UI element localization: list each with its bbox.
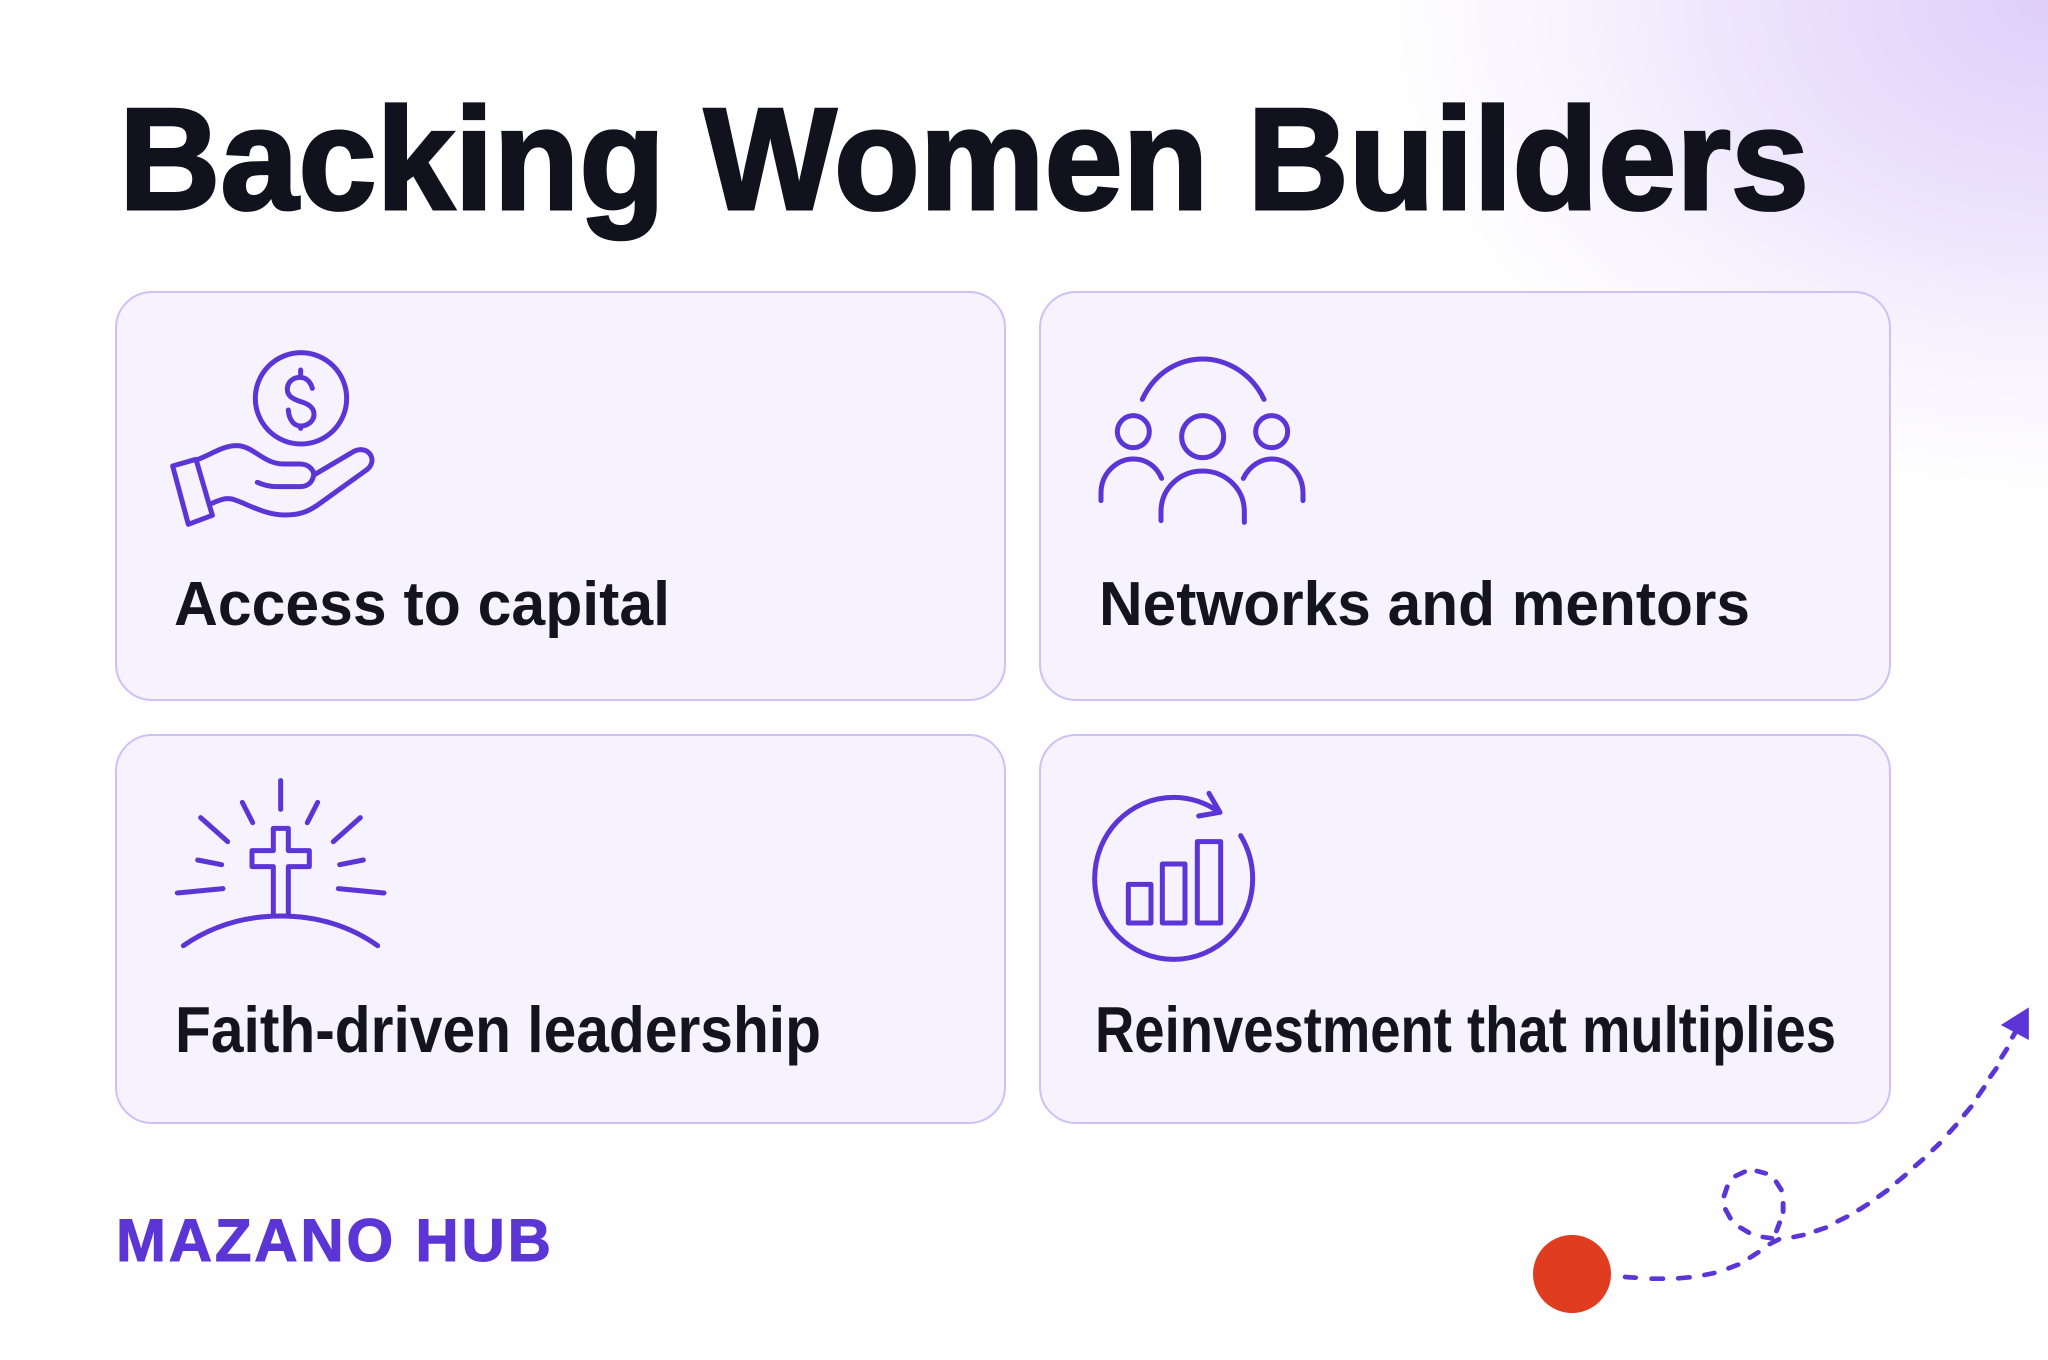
label: faith-driven leadership: Faith-driven leadership (175, 993, 821, 1066)
red start dot (1533, 1235, 1611, 1313)
icon: cross with rays (177, 781, 384, 946)
label: reinvestment that multiplies: Reinvestment that multiplies (1095, 993, 1836, 1066)
panel: access to capital (116, 292, 1005, 700)
icon: hand holding coin (173, 353, 372, 524)
icon: growth bars in circular arrow (1095, 793, 1253, 959)
brand name: MAZANO HUB (116, 1207, 555, 1274)
title: Backing Women Builders (119, 78, 1809, 240)
dashed looping arrow (1625, 1007, 2029, 1279)
label: access to capital: Access to capital (174, 570, 670, 639)
label: networks and mentors: Networks and mentors (1099, 570, 1750, 639)
panel: reinvestment that multiplies (1040, 735, 1890, 1123)
panel: faith-driven leadership (116, 735, 1005, 1123)
icon: group of people (1101, 359, 1303, 522)
panel: networks and mentors (1040, 292, 1890, 700)
